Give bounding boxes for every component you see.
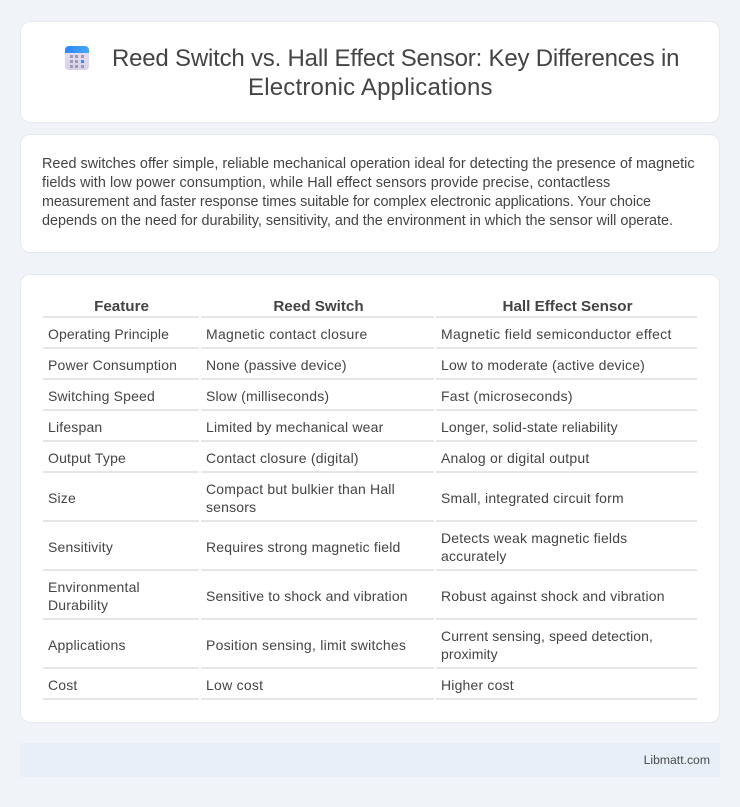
table rows text: Limited by mechanical wear <box>206 419 383 435</box>
summary paragraph: measurement and faster response times suitable for complex electronic applications. Your choice <box>42 194 651 210</box>
table rows text: Size <box>48 490 76 506</box>
title <box>112 45 679 101</box>
table rows text: Power Consumption <box>48 357 177 373</box>
panel: header <box>20 21 720 123</box>
table rows text: Fast (microseconds) <box>441 388 573 404</box>
table rows text: Environmental <box>48 579 140 595</box>
table rows text: Low cost <box>206 677 263 693</box>
table header <box>94 298 632 315</box>
table rows text: proximity <box>441 646 498 662</box>
panel: summary text <box>20 134 720 253</box>
table rows text: Magnetic contact closure <box>206 326 368 342</box>
table header: Feature <box>94 298 149 315</box>
panel: comparison table <box>20 274 720 723</box>
summary paragraph: fields with low power consumption, while Hall effect sensors provide precise, contactless <box>42 175 610 191</box>
table rows text: Compact but bulkier than Hall <box>206 481 395 497</box>
table rows text: Sensitivity <box>48 539 113 555</box>
table rows text: Longer, solid-state reliability <box>441 419 618 435</box>
table rows text: Low to moderate (active device) <box>441 357 645 373</box>
table rows text: Switching Speed <box>48 388 155 404</box>
table rows text: accurately <box>441 548 507 564</box>
title: Electronic Applications <box>248 74 493 101</box>
footer credit: Libmatt.com <box>644 753 710 767</box>
table header: Reed Switch <box>273 298 364 315</box>
table rows text: Magnetic field semiconductor effect <box>441 326 672 342</box>
table rows text: Robust against shock and vibration <box>441 588 665 604</box>
table rows text: Higher cost <box>441 677 514 693</box>
summary paragraph: depends on the need for durability, sensitivity, and the environment in which the sensor will operate. <box>42 213 673 229</box>
table rows text: Analog or digital output <box>441 450 590 466</box>
table rows text: Requires strong magnetic field <box>206 539 400 555</box>
icon: calendar grid <box>65 46 89 70</box>
title: Reed Switch vs. Hall Effect Sensor: Key Differences in <box>112 45 679 72</box>
table rows text: Applications <box>48 637 126 653</box>
table rows text: Output Type <box>48 450 126 466</box>
table header: Hall Effect Sensor <box>502 298 632 315</box>
table rows text: Lifespan <box>48 419 102 435</box>
table rows text: Operating Principle <box>48 326 169 342</box>
table rows text: Current sensing, speed detection, <box>441 628 653 644</box>
table rows text: Slow (milliseconds) <box>206 388 329 404</box>
summary paragraph: Reed switches offer simple, reliable mechanical operation ideal for detecting the presence of magnetic <box>42 156 695 172</box>
summary paragraph <box>42 156 695 229</box>
table rows text: None (passive device) <box>206 357 347 373</box>
table rows text: Detects weak magnetic fields <box>441 530 627 546</box>
table rows text: Position sensing, limit switches <box>206 637 406 653</box>
table rows text: Cost <box>48 677 78 693</box>
table rows text: Contact closure (digital) <box>206 450 359 466</box>
footer <box>20 743 720 777</box>
table rows text: Sensitive to shock and vibration <box>206 588 408 604</box>
table rows text: Small, integrated circuit form <box>441 490 624 506</box>
table rows text: Durability <box>48 597 108 613</box>
table rows text: sensors <box>206 499 256 515</box>
